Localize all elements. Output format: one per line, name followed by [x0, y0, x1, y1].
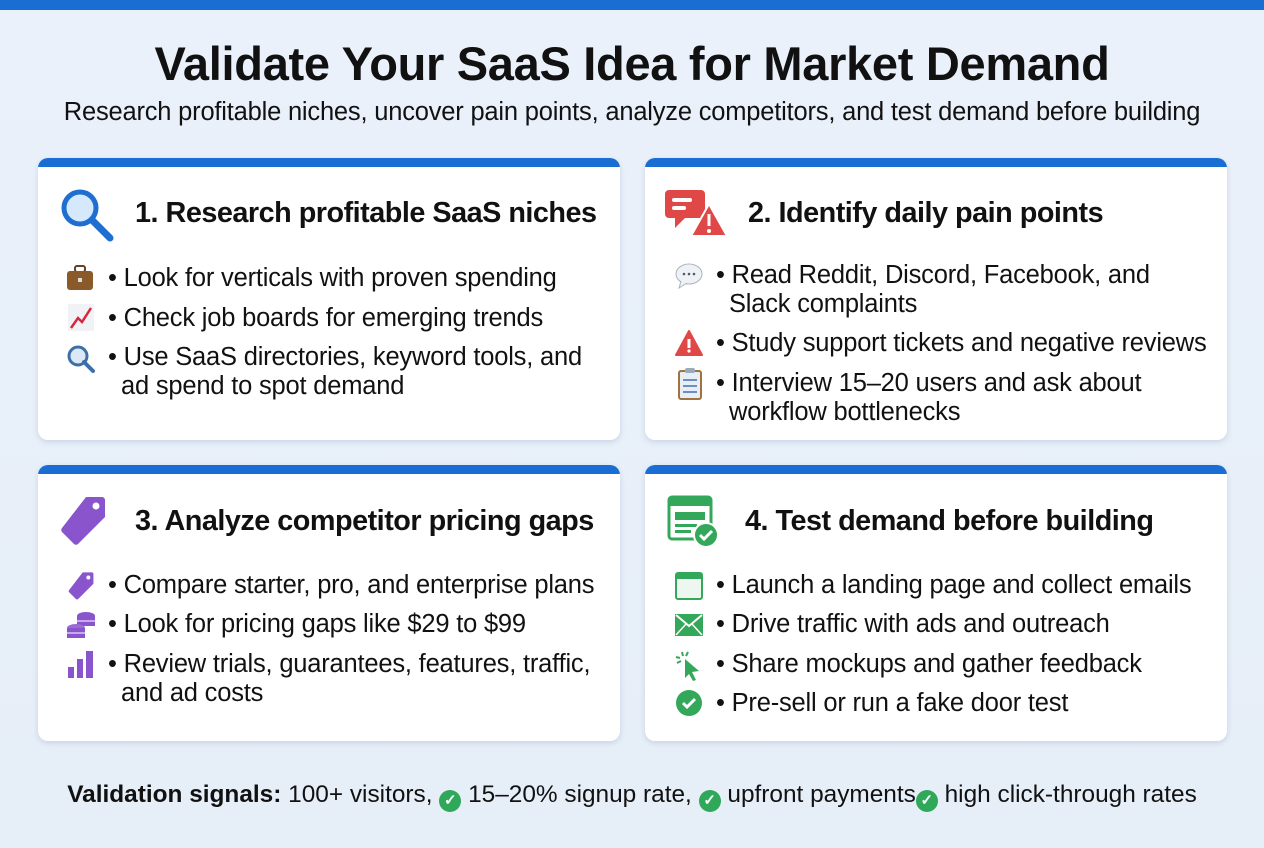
icon: warning	[675, 330, 703, 356]
bullet	[716, 261, 1150, 318]
footer: validation signals: ✓	[921, 792, 933, 809]
bullet: • Use SaaS directories, keyword tools, and	[108, 343, 582, 371]
subtitle: Research profitable niches, uncover pain points, analyze competitors, and test demand before building	[64, 98, 1200, 126]
bullet: • Share mockups and gather feedback	[716, 650, 1142, 678]
icon: small magnifier	[68, 346, 96, 374]
icon: check circle	[676, 690, 702, 716]
bullet: and ad costs	[121, 679, 263, 707]
bullet: • Drive traffic with ads and outreach	[716, 610, 1110, 638]
icon: browser check	[668, 496, 717, 546]
icon: landing page	[675, 572, 703, 600]
footer: validation signals: ✓	[444, 792, 457, 809]
panel: pricing gaps	[38, 465, 620, 741]
icon: coins	[67, 612, 95, 638]
icon: chart	[68, 304, 94, 331]
bullet: ad spend to spot demand	[121, 372, 404, 400]
bullet: • Pre-sell or run a fake door test	[716, 689, 1068, 717]
icon: chat warning	[665, 190, 726, 235]
icon: speech bubble	[676, 264, 702, 289]
panel: research niches	[38, 158, 620, 440]
bullet	[108, 650, 590, 707]
bullet: • Compare starter, pro, and enterprise plans	[108, 571, 594, 599]
heading: 2. Identify daily pain points	[748, 197, 1103, 229]
heading: 1. Research profitable SaaS niches	[135, 197, 597, 229]
bullet: • Look for verticals with proven spending	[108, 264, 557, 292]
heading: 3. Analyze competitor pricing gaps	[135, 505, 594, 537]
footer: validation signals: ✓	[703, 792, 716, 809]
bullet: • Look for pricing gaps like $29 to $99	[108, 610, 526, 638]
bullet: • Study support tickets and negative reviews	[716, 329, 1207, 357]
panel: test demand	[645, 465, 1227, 741]
bullet: workflow bottlenecks	[729, 398, 960, 426]
bullet: Slack complaints	[729, 290, 917, 318]
heading: 4. Test demand before building	[745, 505, 1153, 537]
bullet: • Check job boards for emerging trends	[108, 304, 543, 332]
icon: price tag	[61, 497, 105, 545]
icon: envelope	[675, 614, 703, 636]
icon: cursor	[676, 652, 699, 681]
bullet	[108, 343, 582, 400]
title: Validate Your SaaS Idea for Market Demand	[154, 37, 1110, 90]
bullet: • Launch a landing page and collect emails	[716, 571, 1191, 599]
icon: briefcase	[67, 265, 93, 290]
icon: bars	[68, 651, 93, 678]
icon: magnifier	[62, 190, 114, 242]
icon: small tag	[68, 572, 94, 600]
bullet	[716, 369, 1142, 426]
bullet: • Interview 15–20 users and ask about	[716, 369, 1141, 397]
panel: pain points	[645, 158, 1227, 440]
footer: validation signals: Validation signals: 100+ visitors, 15–20% signup rate, upfront payments high click-through rates	[67, 781, 1197, 808]
bullet: • Read Reddit, Discord, Facebook, and	[716, 261, 1150, 289]
bullet: • Review trials, guarantees, features, traffic,	[108, 650, 590, 678]
icon: clipboard	[678, 368, 702, 400]
